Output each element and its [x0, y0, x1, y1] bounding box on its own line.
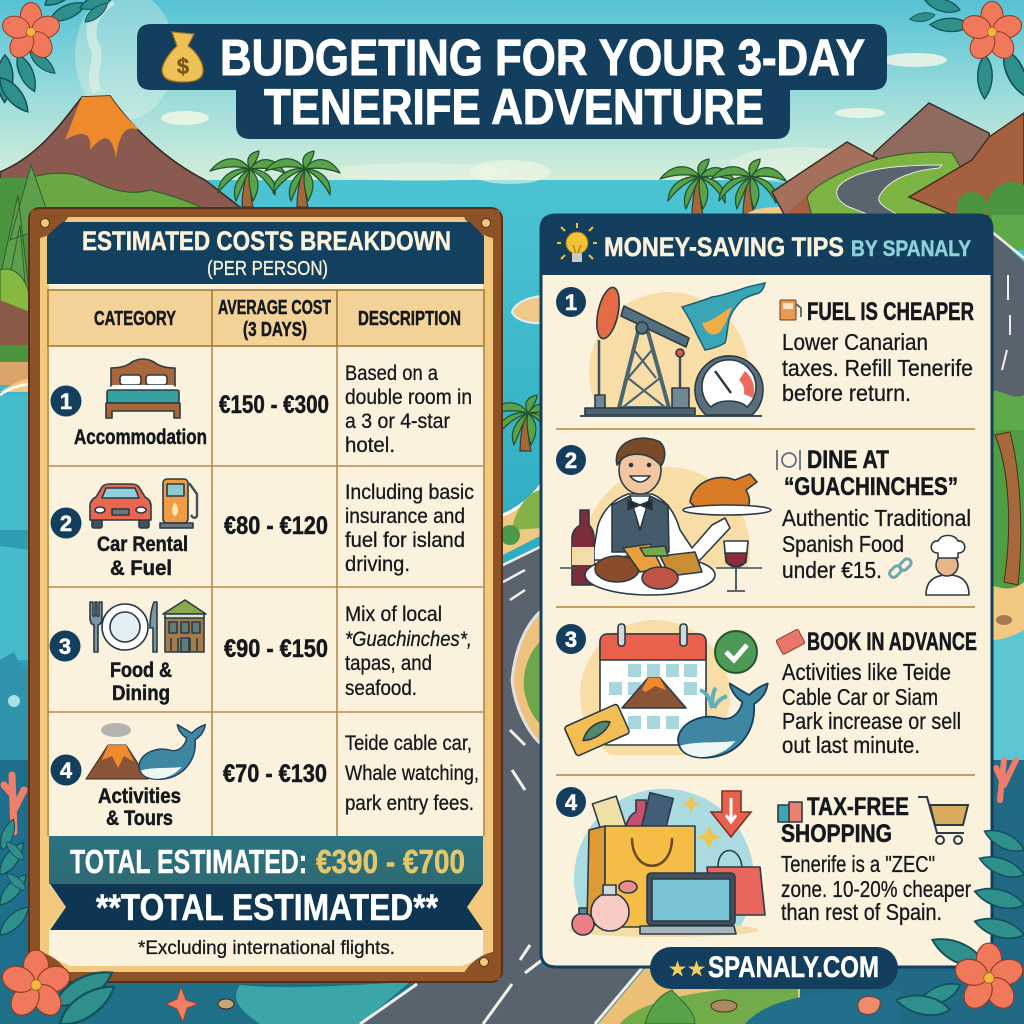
icon: plate and cutlery [90, 602, 157, 652]
background: clouds [75, 0, 947, 184]
panel heading byline: BY SPANALY [851, 236, 971, 261]
row 3: food and dining: Mix of local [345, 603, 442, 626]
row 3: food and dining: *Guachinches*, [345, 628, 472, 651]
tip 2: guachinches [556, 438, 971, 595]
row 4: activities and tours: & Tours [106, 807, 173, 830]
table header row: AVERAGE COST [218, 297, 331, 319]
row 1: accommodation: hotel. [345, 434, 395, 457]
tip 3: book in advance: Activities like Teide [782, 659, 951, 685]
row 3: food and dining: 3 [59, 634, 71, 659]
total band [49, 836, 483, 884]
icon: small cutlery [777, 450, 800, 470]
icon: red bag [707, 850, 765, 915]
icon: bed [106, 359, 180, 418]
table header row: (3 DAYS) [243, 319, 307, 341]
icon: spout [700, 688, 727, 708]
icon: cart [918, 797, 968, 844]
total band: TOTAL ESTIMATED: [70, 843, 307, 880]
panel corner ornaments [31, 210, 500, 980]
title line 2: TENERIFE ADVENTURE [264, 79, 764, 135]
tip 4: tax-free shopping: than rest of Spain. [781, 899, 942, 925]
row 4: activities and tours [50, 723, 479, 830]
icon: wine bottle [572, 510, 594, 585]
icon: laptop [640, 873, 736, 934]
background: sky [0, 0, 1024, 200]
row 3: food and dining: Dining [112, 682, 170, 705]
row 3: food and dining: €90 - €150 [224, 635, 328, 663]
background: right strip [790, 390, 1024, 1024]
tip 2: guachinches: DINE AT [807, 446, 889, 474]
decoration: bottom-left flower with leaves [0, 818, 121, 1024]
table grid lines [48, 346, 484, 836]
icon: fuel pump [160, 479, 197, 528]
website pill: ★★ [668, 958, 706, 981]
icon: small ticket [776, 629, 805, 655]
tip 2: guachinches: “GUACHINCHES” [784, 473, 958, 501]
icon: small fuel pump [780, 300, 801, 320]
dividers [556, 429, 975, 775]
tip 3: book in advance: out last minute. [782, 732, 920, 758]
icon: car [90, 484, 151, 528]
tip 3: book in advance [556, 620, 977, 770]
icon: volcano [86, 723, 148, 779]
icon: shopping bag [587, 826, 695, 927]
row 4: activities and tours: €70 - €130 [223, 760, 327, 788]
footnote: *Excluding international flights. [138, 938, 395, 959]
total band: €390 - €700 [316, 843, 465, 880]
icon: items in bag [592, 793, 673, 837]
row 1: accommodation [50, 359, 472, 457]
row 4: activities and tours: park entry fees. [345, 792, 474, 815]
row 2: car rental and fuel: fuel for island [345, 529, 465, 552]
decoration: bottom-right flower with leaves [894, 822, 1024, 1023]
tip 2: guachinches: Authentic Traditional [782, 505, 971, 531]
tip 1: fuel: Lower Canarian [782, 329, 928, 355]
row 4: activities and tours: Teide cable car, [345, 732, 472, 755]
background: left coral [4, 775, 24, 832]
icon: ticket [564, 704, 630, 756]
icon: money bag [162, 32, 203, 82]
icon: money bag: $ [177, 54, 189, 79]
tip 1: fuel: 1 [565, 290, 577, 315]
panel heading: MONEY-SAVING TIPS [604, 232, 844, 262]
panel heading [47, 222, 484, 284]
row 1: accommodation: 1 [60, 389, 72, 414]
panel heading: ESTIMATED COSTS BREAKDOWN [82, 226, 451, 256]
icon: small bags [778, 802, 802, 822]
icon: light bulb [557, 223, 597, 262]
tip 1: fuel [556, 283, 974, 416]
row 4: activities and tours: 4 [60, 758, 73, 783]
tip 2: guachinches: under €15. [782, 557, 882, 583]
row 3: food and dining: tapas, and [345, 652, 432, 675]
row 1: accommodation: a 3 or 4-star [345, 410, 450, 433]
row 1: accommodation: double room in [345, 386, 472, 409]
icon: wine glass [724, 541, 748, 591]
row 4: activities and tours: Activities [98, 785, 181, 808]
tip 2: guachinches: 2 [565, 448, 577, 473]
decoration: top-left flower with leaves [0, 0, 116, 117]
ribbon: **TOTAL ESTIMATED** [96, 887, 439, 928]
row 2: car rental and fuel: driving. [345, 553, 410, 576]
tip 4: tax-free shopping: TAX-FREE [807, 793, 909, 821]
row 2: car rental and fuel: & Fuel [110, 557, 172, 580]
icon: whale [139, 724, 205, 779]
title line 1: BUDGETING FOR YOUR 3-DAY [220, 29, 865, 86]
tip 3: book in advance: 3 [565, 627, 577, 652]
icon: food plate [585, 544, 715, 595]
table header row [48, 290, 484, 346]
icon: Tenerife map [682, 283, 765, 350]
row 3: food and dining [50, 600, 472, 705]
icon: link [888, 557, 913, 579]
tip 4: tax-free shopping [556, 787, 971, 937]
row 1: accommodation: Accommodation [74, 426, 207, 449]
icon: roast chicken [683, 474, 771, 515]
row 3: food and dining: Food & [110, 659, 172, 682]
row 2: car rental and fuel: €80 - €120 [224, 512, 328, 540]
icon: whale [678, 684, 768, 758]
tip 4: tax-free shopping: Tenerife is a "ZEC" [781, 851, 935, 877]
icon: oil pump [585, 285, 695, 415]
row 2: car rental and fuel [50, 479, 474, 580]
panel heading: (PER PERSON) [207, 258, 328, 280]
panel: estimated costs breakdown [29, 208, 502, 982]
row 2: car rental and fuel: 2 [60, 511, 72, 536]
icon: check badge [715, 631, 757, 673]
tip 1: fuel: before return. [782, 380, 911, 406]
tip 3: book in advance: Park increase or sell [782, 708, 961, 734]
icon: fuel gauge [695, 356, 763, 415]
row 2: car rental and fuel: insurance and [345, 505, 465, 528]
tip 1: fuel: taxes. Refill Tenerife [782, 355, 973, 381]
row 1: accommodation: €150 - €300 [219, 391, 329, 419]
background: palms [210, 151, 786, 215]
icon: perfume bottles [572, 881, 637, 935]
website pill: SPANALY.COM [708, 951, 879, 984]
background: left volcano [0, 0, 250, 215]
panel: money-saving tips [541, 215, 992, 967]
icon: sparkles [681, 795, 722, 849]
tip 4: tax-free shopping: SHOPPING [781, 820, 892, 848]
background: bottom strip [0, 760, 900, 1024]
website pill [650, 947, 898, 989]
icon: waiter with platter [592, 438, 730, 560]
icon: down arrow [711, 791, 751, 837]
background: left forest and beach [0, 165, 52, 760]
table header row: CATEGORY [94, 308, 176, 330]
background: centre gap island and road [380, 296, 563, 1024]
row 4: activities and tours: Whale watching, [345, 762, 479, 785]
row 2: car rental and fuel: Car Rental [97, 533, 188, 556]
icon: calendar [600, 624, 706, 745]
title banner [137, 24, 887, 139]
table header row: DESCRIPTION [358, 308, 461, 330]
decoration: top-right flower with leaves [910, 0, 1024, 100]
row 3: food and dining: seafood. [345, 677, 417, 700]
tip 2: guachinches: Spanish Food [782, 531, 904, 557]
tip 3: book in advance: Cable Car or Siam [782, 684, 938, 710]
icon: chef [926, 535, 969, 595]
background: right mountains and road [745, 103, 1024, 430]
icon: restaurant building [163, 600, 206, 652]
tip 4: tax-free shopping: zone. 10-20% cheaper [781, 876, 971, 902]
row 1: accommodation: Based on a [345, 362, 438, 385]
tip 4: tax-free shopping: 4 [565, 790, 578, 815]
row 2: car rental and fuel: Including basic [345, 481, 474, 504]
